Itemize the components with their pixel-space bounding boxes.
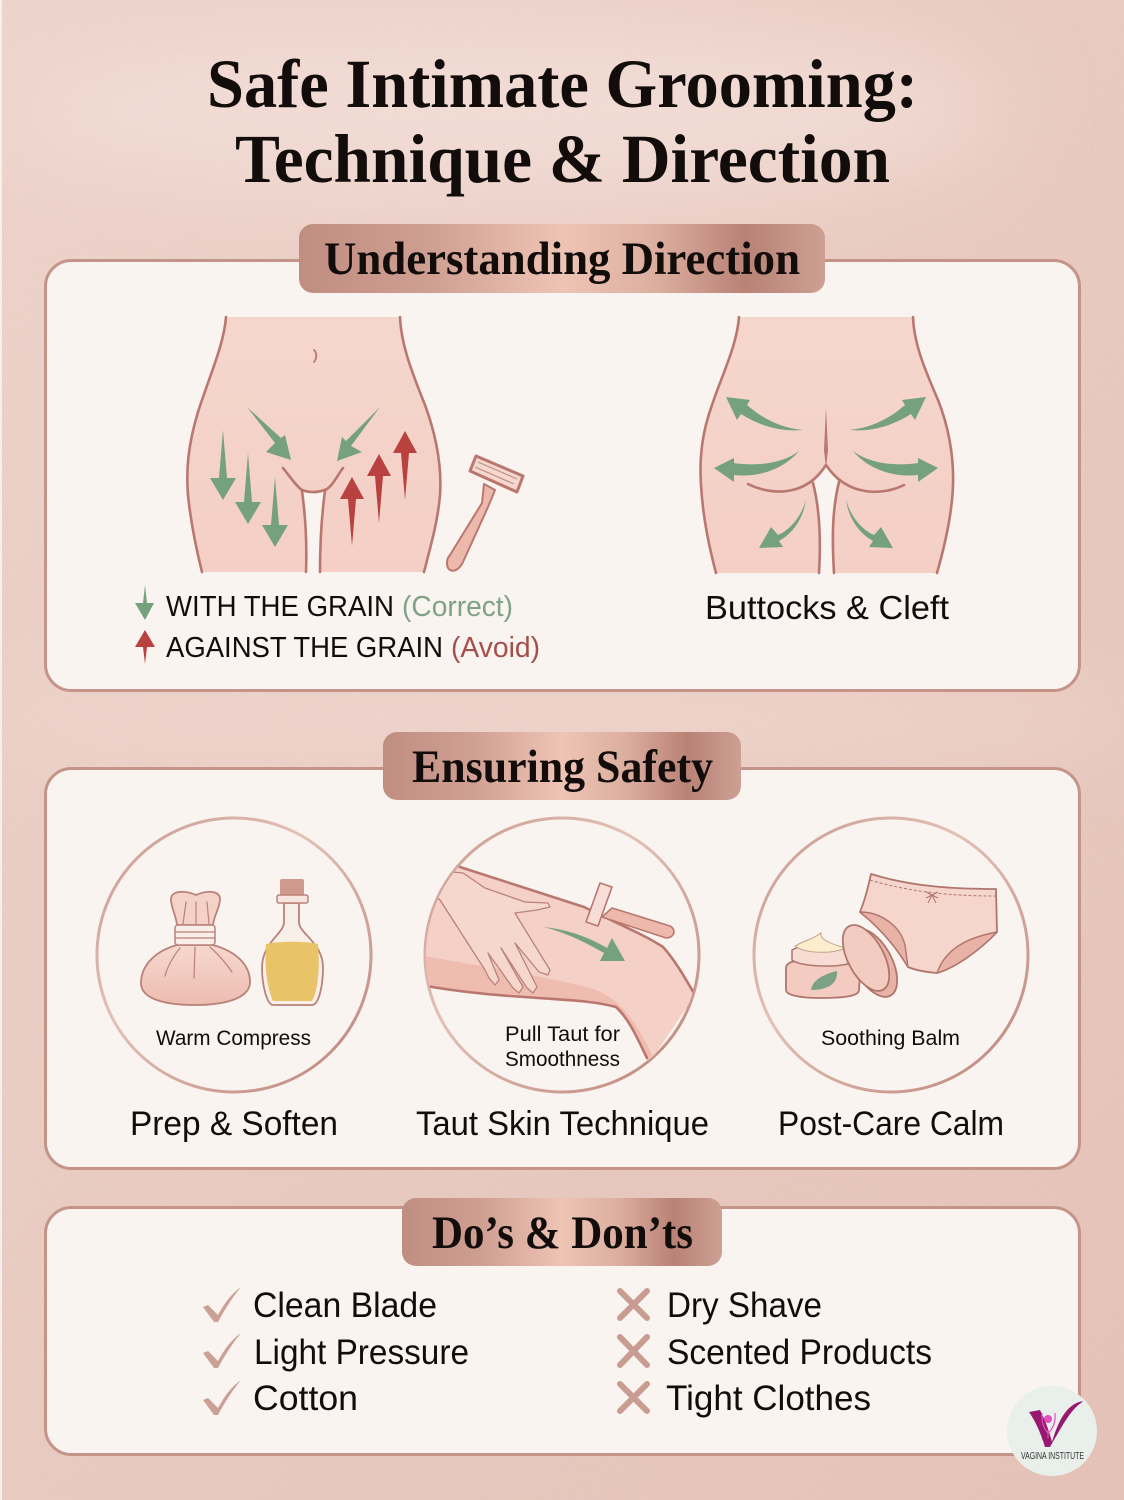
arrows: outward directions [714, 397, 938, 548]
legend [135, 585, 540, 664]
list: do's: Cotton [253, 1379, 358, 1418]
icon: balm jar [786, 918, 907, 1005]
text: pull taut for smoothness: Pull Taut for [505, 1023, 620, 1046]
label: buttocks and cleft: Buttocks & Cleft [705, 589, 949, 626]
icon: underwear [860, 874, 997, 973]
arrows: with the grain [210, 407, 380, 547]
list: do's: Clean Blade [253, 1286, 437, 1325]
title: Technique & Direction [235, 121, 890, 197]
heading badge: ensuring safety: Ensuring Safety [412, 741, 713, 793]
circle: pull taut [420, 818, 699, 1092]
text: pull taut for smoothness [505, 1023, 620, 1071]
front body diagram [187, 317, 440, 572]
rear body diagram [700, 317, 953, 573]
icon: herbal compress [141, 892, 250, 1005]
legend: WITH THE GRAIN [166, 591, 394, 623]
heading badge: do's and don'ts [402, 1198, 722, 1266]
text: warm compress: Warm Compress [156, 1027, 311, 1050]
legend: (Avoid) [451, 632, 540, 664]
panel: do's and don'ts [46, 1198, 1080, 1454]
heading badge: understanding direction: Understanding Direction [324, 233, 800, 285]
text: pull taut for smoothness: Smoothness [505, 1048, 620, 1071]
list: do's: Light Pressure [254, 1333, 469, 1372]
label: prep and soften: Prep & Soften [130, 1105, 338, 1143]
heading badge: do's and don'ts: Do’s & Don’ts [432, 1207, 693, 1259]
panel: understanding direction [46, 224, 1080, 690]
panel: ensuring safety [46, 732, 1080, 1168]
label: post-care calm: Post-Care Calm [778, 1105, 1004, 1143]
heading badge: ensuring safety [383, 732, 741, 800]
title [207, 46, 918, 197]
logo: vagina institute: VAGINA INSTITUTE [1021, 1451, 1084, 1462]
title: Safe Intimate Grooming: [207, 46, 918, 122]
list: don'ts: Scented Products [667, 1333, 932, 1372]
legend: AGAINST THE GRAIN [166, 632, 443, 664]
list: don'ts: Tight Clothes [666, 1379, 871, 1418]
icon: razor [447, 456, 523, 571]
list: do's [203, 1286, 469, 1418]
icon: oil bottle [262, 879, 323, 1005]
legend: (Correct) [402, 591, 513, 623]
list: don'ts [620, 1286, 932, 1418]
circle: soothing balm [754, 818, 1028, 1092]
illustration: leg, hand and razor [420, 867, 695, 1062]
logo: vagina institute [1007, 1386, 1097, 1476]
text: soothing balm: Soothing Balm [821, 1027, 960, 1050]
arrows: against the grain [340, 431, 417, 546]
list: don'ts: Dry Shave [667, 1286, 822, 1325]
label: taut skin technique: Taut Skin Technique [416, 1105, 709, 1143]
circle: warm compress [97, 818, 371, 1092]
